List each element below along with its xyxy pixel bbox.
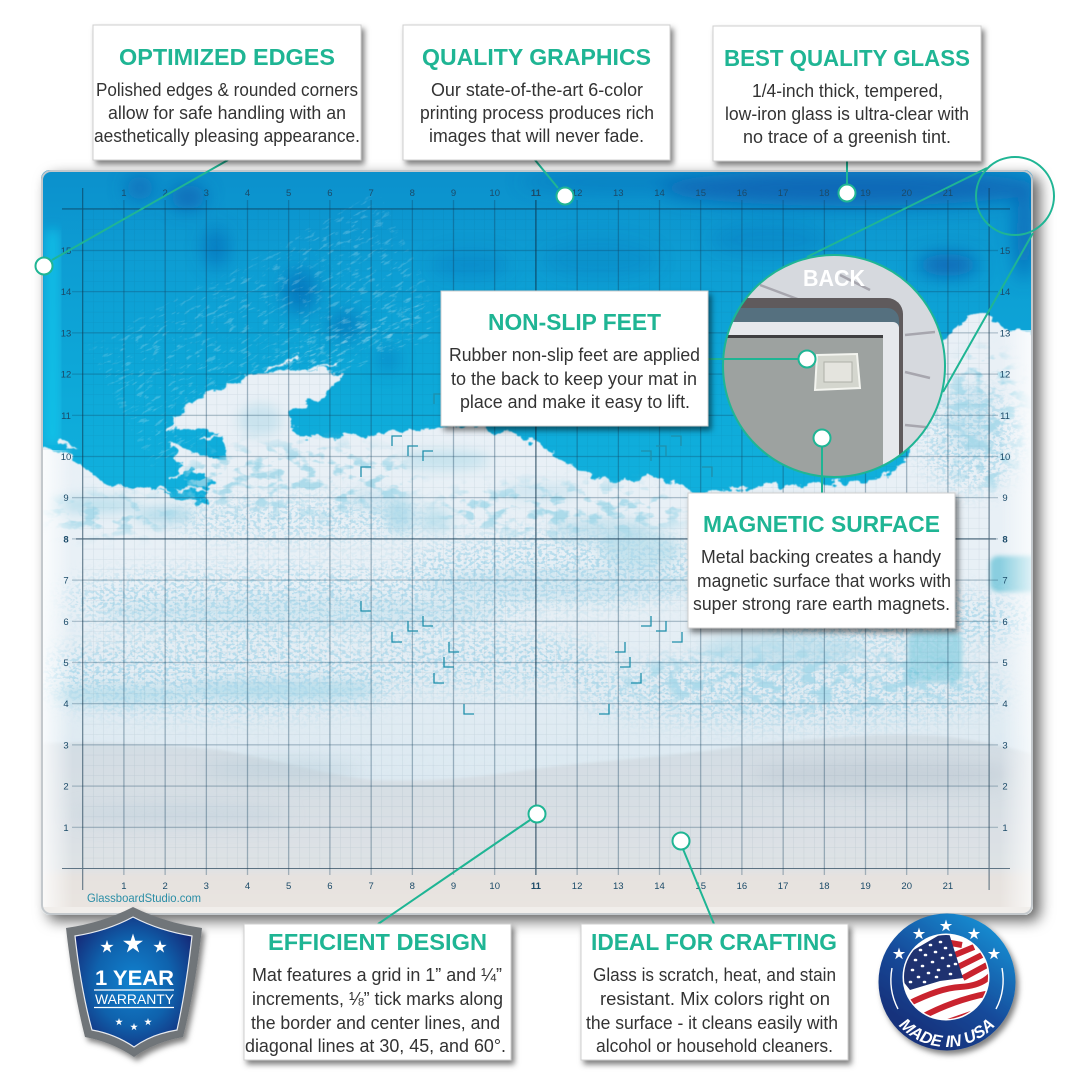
left ruler numbers: 15 <box>61 246 71 257</box>
card: magnetic surface <box>688 493 955 628</box>
card: efficient design: increments, ⅛” tick marks along <box>252 989 503 1009</box>
bottom ruler numbers: 1 <box>121 881 127 892</box>
made in usa badge <box>878 914 1022 1058</box>
card: best quality glass: BEST QUALITY GLASS <box>724 45 970 71</box>
right ruler numbers: 14 <box>1000 287 1010 298</box>
foam veins over the blue tongue <box>55 356 340 510</box>
quarter inch grid <box>83 209 989 868</box>
speckled surf bands <box>20 390 1040 724</box>
right ruler numbers <box>1000 246 1010 834</box>
top ruler numbers: 17 <box>778 188 788 199</box>
bottom ruler numbers: 3 <box>204 881 209 892</box>
left ruler numbers: 1 <box>63 823 69 834</box>
foam shape <box>30 312 1040 930</box>
right ruler numbers: 15 <box>1000 246 1010 257</box>
card: quality graphics: printing process produces rich <box>420 103 654 123</box>
inch grid lines <box>62 188 1010 890</box>
card: quality graphics: QUALITY GRAPHICS <box>422 44 651 70</box>
left ruler numbers: 3 <box>63 740 69 751</box>
warranty shield badge: WARRANTY <box>95 992 174 1007</box>
sand beach <box>42 735 1033 915</box>
card: optimized edges: Polished edges & rounded corners <box>96 80 358 100</box>
card: efficient design: EFFICIENT DESIGN <box>268 929 487 955</box>
zoom lens circle on corner <box>976 157 1054 235</box>
bottom ruler numbers: 10 <box>489 881 500 892</box>
rubber foot <box>815 354 860 390</box>
card: ideal for crafting: resistant. Mix colors right on <box>600 989 830 1009</box>
card: non-slip feet <box>441 291 708 426</box>
right ruler numbers: 4 <box>1002 699 1008 710</box>
top ruler numbers: 13 <box>613 188 624 199</box>
left ruler numbers <box>61 246 71 834</box>
card: optimized edges: allow for safe handling with an <box>108 103 346 123</box>
bottom ruler numbers: 14 <box>654 881 665 892</box>
left ruler numbers: 4 <box>63 699 69 710</box>
card: efficient design: diagonal lines at 30, 45, and 60°. <box>245 1036 506 1056</box>
card: quality graphics: images that will never fade. <box>429 126 644 146</box>
top ruler numbers: 5 <box>286 188 291 199</box>
bottom ruler numbers: 8 <box>410 881 415 892</box>
back label: BACK <box>803 265 865 291</box>
card: ideal for crafting <box>581 924 848 1060</box>
left ruler numbers: 12 <box>61 370 71 381</box>
zoom guide lines <box>807 168 1033 392</box>
card: optimized edges: aesthetically pleasing appearance. <box>94 126 360 146</box>
bottom ruler numbers: 20 <box>901 881 912 892</box>
top ruler numbers: 8 <box>410 188 415 199</box>
top ruler numbers: 2 <box>162 188 168 199</box>
pale blue foam patches <box>50 384 992 705</box>
left ruler numbers: 11 <box>61 411 71 422</box>
card: best quality glass: no trace of a greenish tint. <box>743 127 951 147</box>
diagonal angle bracket marks <box>361 394 712 714</box>
bottom ruler numbers: 17 <box>778 881 788 892</box>
top ruler numbers: 16 <box>737 188 747 199</box>
website text: GlassboardStudio.com <box>87 891 201 905</box>
left ruler numbers: 7 <box>63 576 69 587</box>
card: efficient design: the border and center lines, and <box>251 1013 500 1033</box>
left ruler numbers: 5 <box>63 658 69 669</box>
bottom ruler numbers <box>122 882 953 889</box>
left ruler numbers: 2 <box>63 782 69 793</box>
right ruler numbers: 5 <box>1002 658 1008 669</box>
top ruler numbers: 4 <box>245 188 250 199</box>
right ruler numbers: 12 <box>1000 370 1010 381</box>
bottom ruler numbers: 2 <box>162 881 168 892</box>
bottom ruler numbers: 18 <box>819 881 830 892</box>
left ruler numbers: 8 <box>63 534 69 545</box>
right ruler numbers: 1 <box>1002 823 1008 834</box>
top ruler numbers: 21 <box>943 188 953 199</box>
card: ideal for crafting: the surface - it cleans easily with <box>586 1013 838 1033</box>
card: best quality glass: 1/4-inch thick, tempered, <box>752 81 943 101</box>
sea green stains <box>908 556 1040 682</box>
bottom ruler numbers: 7 <box>368 881 374 892</box>
bottom ruler numbers: 5 <box>286 881 291 892</box>
card: efficient design <box>244 924 511 1060</box>
top ruler numbers: 19 <box>860 188 871 199</box>
card: non-slip feet: Rubber non-slip feet are applied <box>449 345 700 365</box>
top ruler numbers <box>122 190 953 196</box>
top ruler numbers: 9 <box>451 188 456 199</box>
right ruler numbers: 7 <box>1002 576 1008 587</box>
callout dots <box>36 184 856 850</box>
card: optimized edges: OPTIMIZED EDGES <box>119 44 335 70</box>
top ruler numbers: 18 <box>819 188 830 199</box>
right ruler numbers: 11 <box>1000 411 1010 422</box>
bottom ruler numbers: 12 <box>572 881 582 892</box>
top ruler numbers: 6 <box>327 188 333 199</box>
made in usa badge: MADE IN USA <box>898 1018 995 1048</box>
card: efficient design: Mat features a grid in 1” and ¼” <box>252 965 502 985</box>
left ruler numbers: 14 <box>61 287 71 298</box>
card: ideal for crafting: Glass is scratch, heat, and stain <box>593 965 836 985</box>
top ruler numbers: 15 <box>695 188 706 199</box>
bottom ruler numbers: 15 <box>695 881 706 892</box>
bottom ruler numbers: 13 <box>613 881 624 892</box>
card: ideal for crafting: alcohol or household cleaners. <box>596 1036 833 1056</box>
connector lines <box>52 160 847 924</box>
warranty shield badge <box>66 907 202 1057</box>
american flag <box>902 934 990 1020</box>
top ruler numbers: 10 <box>489 188 500 199</box>
bottom ruler numbers: 11 <box>531 881 542 892</box>
ocean artwork <box>41 170 1040 930</box>
right ruler numbers: 2 <box>1002 782 1008 793</box>
right ruler numbers: 6 <box>1002 617 1008 628</box>
top ruler numbers: 1 <box>121 188 127 199</box>
top ruler numbers: 20 <box>901 188 912 199</box>
card: non-slip feet: place and make it easy to lift. <box>460 392 690 412</box>
card: best quality glass <box>713 26 981 161</box>
bottom ruler numbers: 21 <box>943 881 953 892</box>
top ruler numbers: 11 <box>531 188 542 199</box>
bottom ruler numbers: 9 <box>451 881 456 892</box>
top ruler numbers: 14 <box>654 188 665 199</box>
bottom ruler numbers: 19 <box>860 881 871 892</box>
card: magnetic surface: MAGNETIC SURFACE <box>703 511 940 537</box>
card: magnetic surface: Metal backing creates a handy <box>701 547 941 567</box>
right ruler numbers: 13 <box>1000 328 1010 339</box>
right ruler numbers: 10 <box>1000 452 1010 463</box>
card: best quality glass: low-iron glass is ultra-clear with <box>725 104 969 124</box>
left ruler numbers: 9 <box>63 493 69 504</box>
magnified back view <box>722 254 946 478</box>
card: non-slip feet: to the back to keep your mat in <box>451 369 697 389</box>
right ruler numbers: 8 <box>1002 534 1008 545</box>
left ruler numbers: 6 <box>63 617 69 628</box>
top ruler numbers: 12 <box>572 188 582 199</box>
bottom ruler numbers: 16 <box>737 881 747 892</box>
left ruler numbers: 10 <box>61 452 71 463</box>
glass mat board <box>20 170 1040 935</box>
card: ideal for crafting: IDEAL FOR CRAFTING <box>591 929 837 955</box>
left ruler numbers: 13 <box>61 328 71 339</box>
top ruler numbers: 7 <box>368 188 374 199</box>
right ruler numbers: 3 <box>1002 740 1008 751</box>
bottom ruler numbers: 4 <box>245 881 250 892</box>
card: quality graphics: Our state-of-the-art 6-color <box>431 80 643 100</box>
connector to foot <box>708 359 822 493</box>
mottled foam texture <box>40 350 1025 710</box>
warranty shield badge: 1 YEAR <box>95 967 174 990</box>
top ruler numbers: 3 <box>204 188 209 199</box>
card: non-slip feet: NON-SLIP FEET <box>488 309 662 335</box>
card: magnetic surface: super strong rare earth magnets. <box>693 594 950 614</box>
right ruler numbers: 9 <box>1002 493 1008 504</box>
bottom ruler numbers: 6 <box>327 881 333 892</box>
card: magnetic surface: magnetic surface that works with <box>697 571 951 591</box>
card: optimized edges <box>93 25 361 160</box>
card: quality graphics <box>403 25 670 160</box>
